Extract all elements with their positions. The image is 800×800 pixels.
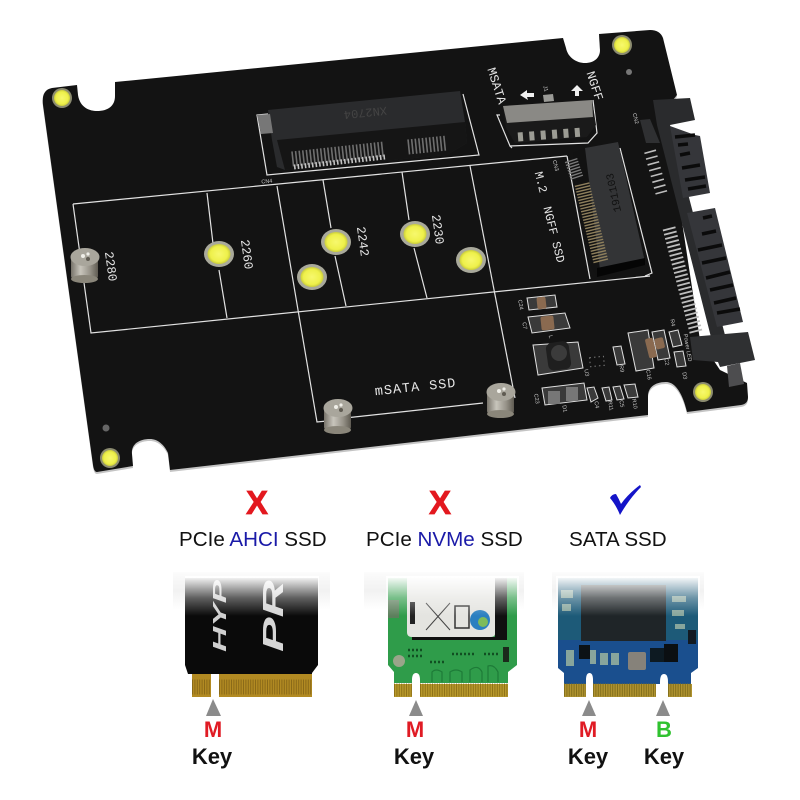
M.2 socket: 191103 xyxy=(605,172,625,213)
key letter M: M xyxy=(579,717,597,742)
Key label: Key xyxy=(192,744,233,769)
heading: PCIe NVMe SSD: PCIe NVMe SSD xyxy=(366,528,523,551)
small component labels: U3 xyxy=(582,369,590,377)
small component labels: C4 xyxy=(592,401,600,409)
key letter M: M xyxy=(406,717,424,742)
small component labels: CN3 xyxy=(551,160,559,172)
icon: red X: X xyxy=(429,484,451,521)
key letter M: M xyxy=(204,717,222,742)
small component labels: C5 xyxy=(617,400,625,408)
small component labels xyxy=(261,85,692,413)
pointer triangle B xyxy=(656,700,670,716)
size labels xyxy=(101,214,446,282)
small component labels: C24 xyxy=(516,299,524,310)
small component labels: R4 xyxy=(668,319,676,327)
label: NGFF switch direction: NGFF xyxy=(583,70,605,103)
label: MSATA switch direction: MSATA xyxy=(483,66,508,107)
small component labels: L xyxy=(547,335,553,339)
heading: SATA SSD: SATA SSD xyxy=(569,528,667,551)
size labels: 2242 xyxy=(353,226,371,257)
small component labels: C7 xyxy=(520,322,528,330)
size labels: 2230 xyxy=(428,214,446,245)
board edge shadow xyxy=(43,32,748,474)
SSD photo: black Kingston card xyxy=(173,572,330,697)
silkscreen outlines xyxy=(73,94,652,422)
screws xyxy=(70,248,516,434)
SSD photo: black Kingston card: PR xyxy=(258,580,290,652)
mSATA socket xyxy=(257,91,467,170)
size labels: 2280 xyxy=(101,251,119,282)
mSATA socket: XN2704 xyxy=(343,103,388,121)
SSD photo: green card xyxy=(364,572,524,697)
Key label M: Key xyxy=(568,744,609,769)
heading: PCIe AHCI SSD: PCIe AHCI SSD xyxy=(179,528,327,551)
small component labels: C2 xyxy=(662,358,670,366)
small component labels: Power LED xyxy=(682,334,692,362)
label: mSATA SSD: mSATA SSD xyxy=(374,377,457,400)
surface mount components xyxy=(527,295,686,405)
slide switch xyxy=(503,85,596,143)
small component labels: J1 xyxy=(541,85,549,92)
small component labels: R10 xyxy=(630,398,638,409)
board body xyxy=(43,30,748,472)
small component labels: D1 xyxy=(560,405,568,413)
size labels: 2260 xyxy=(237,239,255,270)
pointer triangle M xyxy=(582,700,596,716)
SSD photo: blue card xyxy=(552,572,704,697)
Key label B: Key xyxy=(644,744,685,769)
small component labels: C23 xyxy=(532,393,540,404)
icon: red X: X xyxy=(246,484,268,521)
pointer triangle xyxy=(206,699,221,716)
small component labels: CN4 xyxy=(261,179,273,185)
small component labels: D3 xyxy=(680,372,688,380)
small component labels: C16 xyxy=(644,369,652,380)
column: PCIe NVMe SSD xyxy=(364,484,524,769)
column: PCIe AHCI SSD xyxy=(173,484,330,769)
key letter B: B xyxy=(656,717,672,742)
SATA connector xyxy=(640,98,755,387)
Key label: Key xyxy=(394,744,435,769)
small component labels: R9 xyxy=(617,365,625,373)
small component labels: CN2 xyxy=(631,113,639,125)
pointer triangle xyxy=(409,700,423,716)
column: SATA SSD xyxy=(552,485,704,769)
panel: adapter circuit board xyxy=(43,30,755,474)
small component labels: R11 xyxy=(606,401,614,411)
SSD photo: black Kingston card: HYP xyxy=(210,578,230,652)
icon: blue check mark xyxy=(610,485,641,515)
mounting pads with yellow centres xyxy=(52,35,713,468)
M.2 socket xyxy=(571,142,645,277)
label: M.2 NGFF SSD: M.2 NGFF SSD xyxy=(531,170,567,264)
